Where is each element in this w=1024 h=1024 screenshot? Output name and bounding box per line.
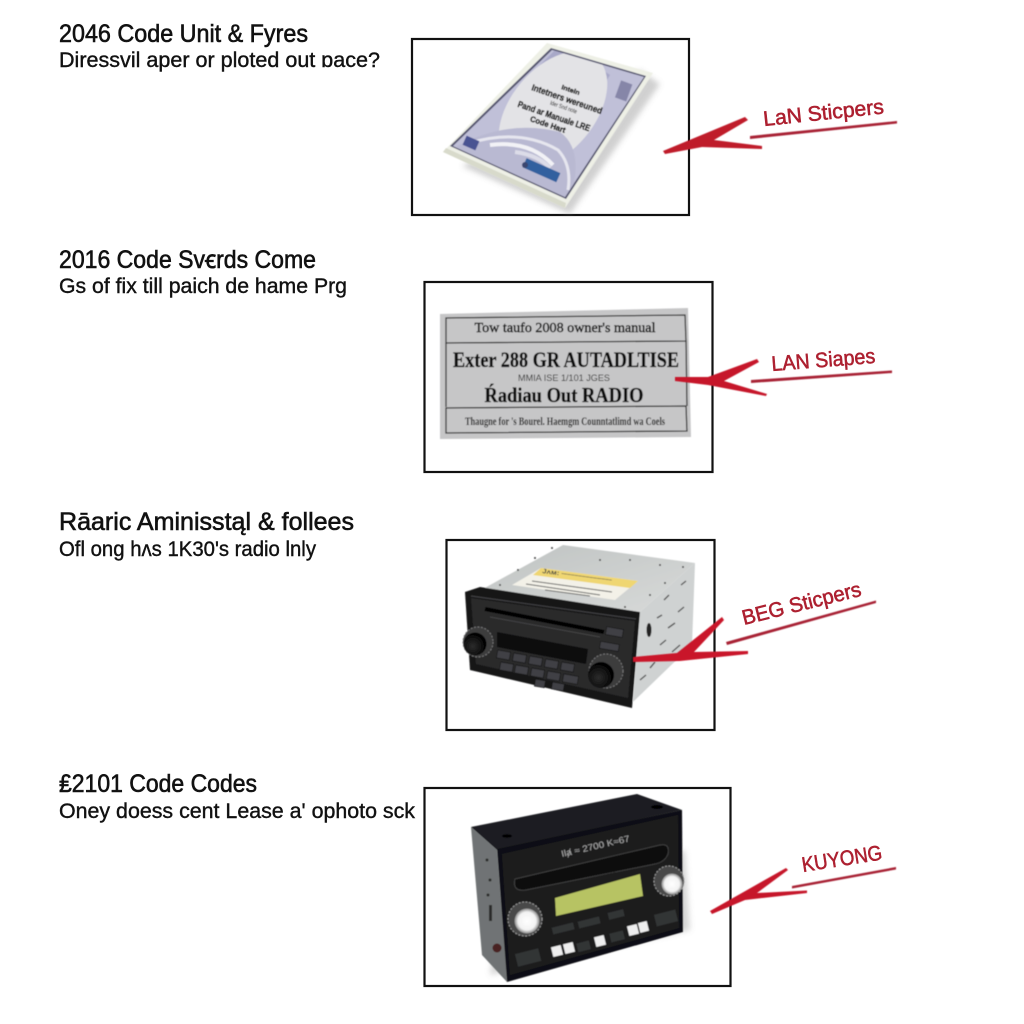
arrow 4 <box>710 867 896 914</box>
section 3 heading: Ofl ong hʌs 1K30's radio lnly <box>59 537 316 561</box>
arrow 3 <box>633 600 876 662</box>
section 2 heading: Gs of fix till paich de hame Prg <box>59 274 347 298</box>
section 1 heading: Diressvil aper or ploted out ɒace? <box>59 48 380 72</box>
icon: manual booklet <box>443 31 660 214</box>
panel 2: owner's manual label <box>424 282 712 472</box>
panel 3: head unit with sticker <box>446 540 714 730</box>
section 2 heading: 2016 Code Svꞓrds Come <box>59 246 316 274</box>
callout label 2: LAN Siapes <box>771 345 876 376</box>
icon: printed label: Exter 288 GR AUTADLTISE <box>453 347 679 372</box>
arrow 1 <box>663 117 897 154</box>
icon: black head unit: ᴙSUT TᴏU2003 <box>575 872 617 888</box>
icon: manual booklet: lder Snd note <box>549 101 578 116</box>
section 2 heading <box>59 246 347 298</box>
icon: silver radio with sticker: Jᴧᴍ: ───────── <box>542 568 613 584</box>
icon: silver radio with sticker <box>463 545 695 708</box>
callout label 4: KUYONG <box>800 842 884 877</box>
section 1 heading <box>59 20 380 72</box>
arrow 2 <box>675 359 892 396</box>
section 3 heading: Rāaric Aminisstąl & follees <box>59 508 354 536</box>
callout label 1: LaN Sticpers <box>762 95 885 131</box>
callout label 3: BEG Sticpers <box>740 578 864 630</box>
icon: printed label <box>440 308 691 439</box>
section 3 heading <box>59 508 354 561</box>
icon: printed label: Tow taufo 2008 owner's manual <box>474 321 656 336</box>
section 4 heading <box>59 770 415 823</box>
section 1 heading: 2046 Code Unit & Fyres <box>59 20 308 48</box>
icon: printed label: Thaugne for 's Bourel. Haemgm Counntatlimd wa Coels <box>465 416 665 428</box>
icon: manual booklet: Pand ar Manuale LRE <box>516 99 592 133</box>
section 4 heading: Oney doess cent Lease a' ophoto sck <box>59 799 415 823</box>
section 4 heading: ₤2101 Code Codes <box>59 770 257 798</box>
icon: black head unit <box>471 794 690 982</box>
panel 4: black radio <box>424 788 730 986</box>
panel 1: manual photo <box>412 31 689 215</box>
icon: manual booklet: Code Hart <box>529 114 567 135</box>
icon: manual booklet: Intetners wereuned <box>530 82 604 116</box>
icon: printed label: MMIA ISE 1/101 JGES <box>518 373 610 383</box>
icon: printed label: Ŕadiau Out RADIO <box>484 383 644 407</box>
icon: manual booklet: Inteln <box>560 84 581 97</box>
icon: black head unit: Ilⱥ ≈ 2700 K≈67 <box>560 833 631 859</box>
